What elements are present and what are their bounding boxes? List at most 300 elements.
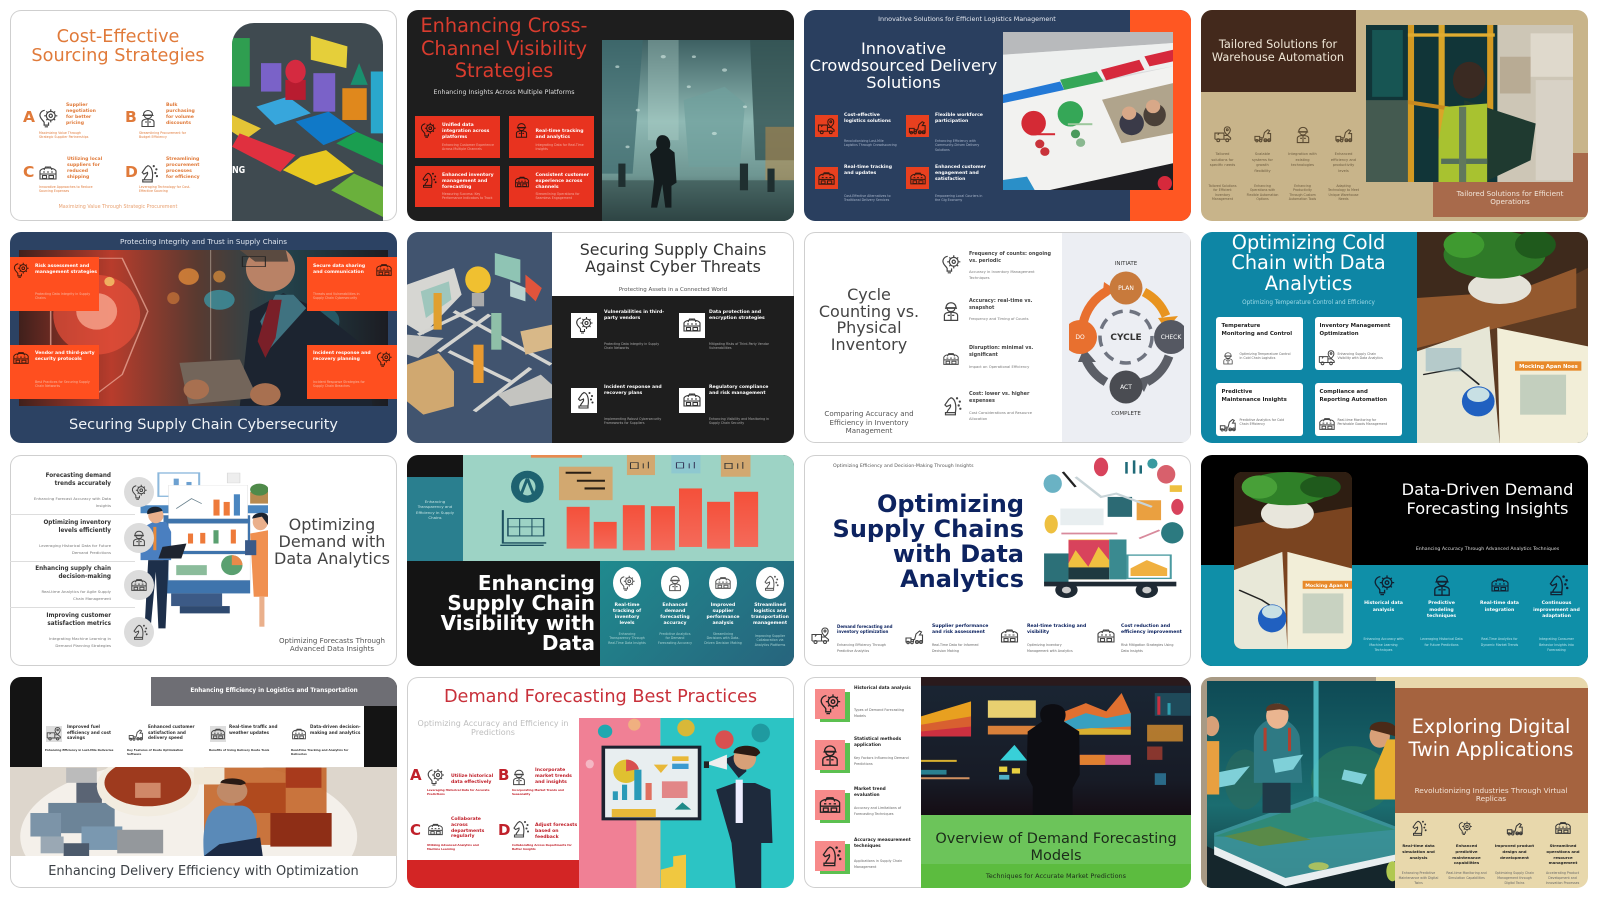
item: decision making: decision-making (58, 574, 111, 580)
title: Analytics (1265, 272, 1352, 295)
column: tailored solutions: for Efficient (1213, 188, 1232, 192)
item: cost reduction: efficiency improvement (1121, 630, 1182, 635)
item D (125, 156, 200, 193)
card: enhanced inventory (415, 166, 500, 207)
item: frequency (942, 251, 1051, 280)
panel: Cost-Effective Sourcing Strategies (10, 10, 397, 221)
image: man with tablet and shield (19, 250, 388, 406)
item D: D (125, 163, 138, 181)
panel: bottom teal features (600, 561, 794, 666)
item: flexible workforce: Flexible workforce (935, 113, 983, 118)
card: consistent customer: Seamless Engagement (536, 196, 572, 200)
subtitle: Optimizing Forecasts Through (279, 636, 385, 645)
column: historical data (1356, 571, 1410, 661)
column: continuous improvement: Continuous (1542, 601, 1571, 606)
item C: Collaborate (451, 817, 481, 822)
column: real-time integration (1472, 571, 1526, 661)
item D: for efficiency (166, 175, 200, 180)
card: compliance reporting: Real-time Monitoring for (1338, 418, 1376, 422)
card: unified data: Enhancing Customer Experience (442, 143, 494, 147)
column: predictive modeling: Leveraging Historical Data (1420, 637, 1463, 641)
column: logistics: logistics and (754, 609, 786, 614)
callout: subtitle block: Chains (428, 515, 442, 520)
title: Data-Driven Demand (1402, 480, 1573, 499)
item A: Utilize historical (451, 774, 493, 779)
column: real-time tracking: inventory (615, 615, 639, 620)
item: flexible workforce: Community-Driven Delivery (935, 143, 979, 147)
item: cost reduction: Risk Mitigation Strategies Using (1121, 643, 1173, 647)
title (407, 573, 595, 653)
card: vendor security (10, 345, 99, 399)
item C: reduced (67, 169, 88, 174)
column: continuous improvement: Behavior Insights into (1539, 642, 1574, 646)
card: unified data (415, 116, 500, 158)
card: unified data: Unified data (442, 123, 474, 128)
column: continuous improvement: Forecasting (1547, 648, 1566, 652)
item: flexible workforce (906, 112, 983, 152)
card: secure data sharing: Secure data sharing (313, 264, 365, 269)
column: real-time tracking (603, 567, 651, 659)
item D: based on (535, 829, 559, 834)
column: continuous improvement: Integrating Consumer (1539, 637, 1574, 641)
panel: Cycle Counting vs. Physical Inventory (804, 232, 1191, 443)
item: traffic updates (209, 724, 284, 758)
card: temperature monitoring: Optimizing Temperature Control (1240, 352, 1290, 356)
card: inventory optimization: Enhancing Supply Chain (1338, 352, 1376, 356)
item: disruption: significant (969, 352, 998, 358)
chart: PDCA cycle: INITIATE (1115, 261, 1138, 267)
footer subtitle: Maximizing Value Through Strategic Procurement (59, 205, 177, 210)
column: real-time tracking: levels (619, 621, 635, 626)
column: product design: Optimizing Supply Chain (1495, 871, 1534, 875)
header band: Enhancing Efficiency in Logistics and Transportation (190, 688, 358, 694)
item: customer satisfaction: satisfaction metrics (47, 621, 111, 627)
title: with Data (893, 540, 1024, 568)
item B (498, 767, 583, 799)
item: real-time tracking: Management with Analytics (1027, 649, 1073, 653)
item: data-driven decisions: Deliveries (291, 752, 307, 756)
title: Data Analytics (274, 549, 390, 568)
item: cost reduction: Cost reduction and (1121, 624, 1170, 629)
item C: shipping (67, 175, 89, 180)
column: integration (1288, 126, 1317, 201)
item: accuracy (944, 298, 1032, 321)
subtitle: Advanced Data Insights (290, 644, 374, 653)
column: real-time tracking: Real-time (615, 603, 639, 608)
column: integration: Enhancing (1294, 184, 1311, 188)
item: cost: expenses (969, 398, 995, 404)
item: real-time tracking: Cost-Effective Alternatives to (844, 194, 891, 198)
image: analyst and mosaic of data (10, 767, 397, 856)
item: accuracy measurement: Management (854, 865, 876, 869)
column: scalable systems: growth (1256, 163, 1269, 167)
card: risk assessment: Chains (35, 296, 46, 300)
item: traffic updates: weather updates (229, 730, 269, 735)
column: scalable systems: Operations with (1250, 188, 1275, 192)
item: cost-effective (815, 112, 897, 147)
item: demand forecasting: Demand forecasting and (837, 624, 892, 629)
band: lower subtitle area (921, 864, 1191, 888)
item C: Machine Learning (427, 847, 455, 851)
card: temperature monitoring: in Cold Chain Logistics (1240, 356, 1275, 360)
top subtitle: Optimizing Efficiency and Decision-Making Through Insights (833, 464, 974, 469)
title: Securing Supply Chains (580, 240, 766, 259)
item: customer satisfaction (127, 724, 202, 758)
subtitle: Optimizing Accuracy and Efficiency in (418, 719, 568, 728)
panel: Cost-Effective Sourcing Strategies: Budget Efficiency (139, 135, 167, 139)
column: simulation: Real-time data (1402, 843, 1435, 848)
subtitle (824, 409, 914, 435)
column: predictive modeling: techniques (1427, 614, 1456, 619)
column: operations (1538, 817, 1588, 887)
column: demand forecasting: Enhanced (662, 603, 688, 608)
item C: Utilizing Advanced Analytics and (427, 843, 479, 847)
item: supplier performance: Real-Time Data for Informed (932, 643, 978, 647)
item: cost: Cost Considerations and Resource (969, 411, 1032, 415)
item: decision making: Real-time Analytics for Agile Supply (42, 589, 111, 594)
card: risk assessment: Risk assessment and (35, 264, 89, 269)
item: enhanced customer (906, 164, 986, 202)
column: logistics: Streamlined (754, 603, 786, 608)
title: Optimizing (877, 490, 1024, 518)
item: real-time tracking (815, 164, 892, 202)
card: predictive maintenance: Maintenance Insights (1222, 397, 1287, 403)
chart: PDCA cycle: PLAN (1118, 285, 1134, 292)
subtitle: Replicas (1476, 794, 1506, 803)
title: Strategies (455, 59, 553, 82)
item: regulatory compliance (679, 384, 769, 425)
item: disruption (943, 345, 1033, 369)
column: logistics (746, 567, 794, 659)
item: customer satisfaction: delivery speed (148, 735, 183, 740)
column: scalable systems: Options (1256, 197, 1269, 201)
item: statistical methods (815, 737, 919, 781)
card: risk assessment (10, 257, 99, 311)
column: supplier performance: Decisions with Data- (707, 636, 739, 640)
item: cost: Cost: lower vs. higher (969, 391, 1029, 397)
title: Solutions (866, 73, 941, 92)
item B: Incorporate (535, 768, 565, 773)
title: Forecasting Insights (1407, 499, 1568, 518)
subtitle: Predictions (471, 728, 515, 737)
item C: suppliers for (67, 163, 100, 168)
column: supplier performance: performance (706, 615, 740, 620)
title: Chain with Data (1231, 251, 1386, 274)
item: cost (944, 391, 1032, 421)
column: predictive modeling: Predictive (1428, 601, 1455, 606)
title: Inventory (831, 335, 907, 354)
column: demand forecasting: for Demand (666, 636, 684, 640)
title (814, 492, 1024, 592)
title: Enhancing Cross- (420, 14, 588, 37)
callout: subtitle block: Transparency and (418, 504, 452, 509)
item C: departments (451, 829, 484, 834)
image: isometric logistics network (407, 232, 552, 443)
item: customer satisfaction: Enhanced customer (148, 724, 195, 729)
item: customer satisfaction: Key Features of Route Optimization (127, 748, 183, 752)
header band (151, 677, 397, 706)
column: efficiency: efficiency and (1331, 158, 1356, 162)
panel: Enhancing Delivery Efficiency with Optimization (10, 677, 397, 888)
item C: across (451, 823, 468, 828)
title: Securing Supply Chain Cybersecurity (69, 417, 338, 433)
item: forecasting demand: Enhancing Forecast Accuracy with Data (34, 496, 111, 501)
item: frequency: Frequency of counts: ongoing (969, 251, 1051, 257)
column: supplier performance: Streamlining (713, 632, 733, 636)
card: real-time tracking: Integrating Data for Real-Time (536, 143, 584, 147)
item: fuel efficiency: savings (67, 735, 85, 740)
item A: Maximizing Value Through (39, 131, 81, 135)
item: accuracy measurement: Accuracy measurement (854, 838, 911, 843)
column: historical data: analysis (1373, 608, 1394, 613)
title (420, 14, 588, 82)
title: Supply Chains (833, 515, 1024, 543)
panel: Optimizing Demand with Data Analytics (10, 455, 397, 666)
column: predictive modeling: modeling (1429, 608, 1454, 613)
card: incident response: Incident Response Strategies for (313, 380, 365, 384)
column: demand forecasting: forecasting (660, 615, 690, 620)
item A: for better (66, 115, 91, 120)
column: product design: development (1500, 855, 1529, 860)
item B (125, 102, 195, 139)
callout: subtitle block (407, 477, 463, 561)
item: inventory levels: Leveraging Historical Data for Future (39, 543, 111, 548)
dark content area (552, 296, 794, 443)
item D: D (498, 821, 510, 839)
card: vendor security: security protocols (35, 357, 82, 362)
left strip (1200, 677, 1206, 888)
column: efficiency (1328, 129, 1359, 201)
item: customer satisfaction: Integrating Machine Learning in (49, 636, 111, 641)
column: logistics: Collaboration via (756, 638, 783, 642)
item D: Streamlining (166, 157, 199, 162)
item: accuracy measurement: techniques (854, 844, 881, 849)
column: product design: Improved product (1495, 843, 1534, 848)
column: simulation: Enhancing Predictive (1402, 871, 1435, 875)
item: disruption: Impact on Operational Efficiency (969, 365, 1029, 369)
item A: Leveraging Historical Data for Accurate (427, 788, 490, 792)
card: vendor security: Vendor and third-party (35, 351, 95, 356)
teal lower band (1200, 565, 1588, 666)
subtitle (407, 719, 579, 738)
column: real-time tracking: tracking of (613, 609, 641, 614)
item: forecasting demand: trends accurately (55, 481, 111, 487)
accent band (1130, 10, 1191, 221)
column: supplier performance: supplier (712, 609, 734, 614)
column: operations: Development and (1548, 876, 1577, 880)
card: enhanced inventory: Enhanced inventory (442, 173, 494, 178)
item: customer satisfaction: Software (127, 752, 141, 756)
item B: discounts (166, 121, 191, 126)
title: Twin Applications (1408, 738, 1574, 760)
item: supplier performance: Supplier performance (932, 624, 988, 629)
item B: B (498, 766, 509, 784)
item: customer satisfaction: satisfaction and (148, 730, 186, 735)
subtitle: Management (846, 426, 892, 435)
title (921, 831, 1191, 865)
item: cost-effective: Logistics Through Crowdsourcing (844, 143, 897, 147)
item: regulatory compliance: Enhancing Visibility and Monitoring in (709, 417, 769, 421)
item: market trend: Market trend (854, 787, 886, 792)
item: fuel efficiency: Enhancing Efficiency in Last-Mile Deliveries (45, 748, 113, 752)
image: presenter at board (579, 718, 794, 888)
item: statistical methods: Key Factors Influencing Demand (854, 756, 909, 760)
subtitle: Revolutionizing Industries Through Virtual (1415, 786, 1567, 795)
panel: Cost-Effective Sourcing Strategies: Strategic Supplier Partnerships (39, 135, 88, 139)
image: warehouse worker (1366, 25, 1573, 182)
item: cost-effective: logistics solutions (844, 119, 891, 124)
chart: PDCA cycle: CYCLE (1110, 333, 1142, 343)
column: demand forecasting (651, 567, 699, 659)
panel: Optimizing Supply Chains with Data Analytics (804, 455, 1191, 666)
title: Crowdsourced Delivery (810, 56, 997, 75)
column: continuous improvement (1530, 571, 1584, 661)
item: frequency: Accuracy in Inventory Management (969, 270, 1035, 274)
top subtitle: Protecting Integrity and Trust in Supply Chains (120, 237, 287, 246)
item: regulatory compliance: and risk management (709, 391, 766, 396)
column: real-time tracking: Enhancing (619, 632, 635, 636)
item: cost-effective: Revolutionizing Last-Mile (844, 139, 884, 143)
item: market trend: evaluation (854, 793, 880, 798)
title block: Tailored Solutions for (1219, 38, 1337, 51)
item C: C (410, 821, 421, 839)
item: real-time tracking: Optimizing Inventory (1027, 643, 1062, 647)
column: efficiency: levels (1338, 169, 1349, 173)
item: incident response: Frameworks for Suppliers (604, 421, 645, 425)
item: accuracy: snapshot (969, 305, 994, 311)
column: efficiency: productivity (1333, 163, 1354, 167)
item: enhanced customer: Enhanced customer (935, 165, 986, 170)
image: colourful isometric blocks (232, 23, 383, 221)
item: decision making (35, 565, 154, 601)
panel: Securing Supply Chains Against Cyber Threats (407, 232, 794, 443)
title: Physical (836, 318, 902, 337)
column: tailored solutions: Management (1212, 197, 1233, 201)
card: inventory optimization: Visibility with Data Analytics (1338, 356, 1383, 360)
column: product design (1490, 817, 1538, 887)
item: accuracy: Frequency and Timing of Counts (969, 317, 1029, 321)
card: consistent customer: Consistent customer (536, 173, 589, 178)
item: forecasting demand (34, 472, 154, 508)
column: operations: management (1549, 860, 1577, 865)
item D: Leveraging Technology for Cost- (139, 185, 190, 189)
column: predictive maintenance: Real-time Monitoring and (1446, 871, 1487, 875)
card: risk assessment: management strategies (35, 270, 97, 275)
title: Visibility with (441, 611, 595, 635)
callout: subtitle block: Enhancing (425, 499, 445, 504)
column: integration: Through Custom (1289, 193, 1316, 197)
column: product design: design and (1502, 849, 1527, 854)
column: scalable systems: flexibility (1254, 169, 1271, 173)
item: demand forecasting: Predictive Analytics (837, 649, 869, 653)
white content panel (42, 677, 364, 767)
card: real-time tracking: and analytics (536, 135, 570, 140)
item: real-time tracking: Real-time tracking (844, 165, 892, 170)
column: tailored solutions: Inventory (1215, 193, 1230, 197)
item: real-time tracking (999, 624, 1091, 656)
column: efficiency: Technology to Meet (1328, 188, 1359, 192)
item C: regularly (451, 834, 474, 839)
item: flexible workforce: Enhancing Efficiency with (935, 139, 976, 143)
column: demand forecasting: Predictive Analytics (659, 632, 691, 636)
column: continuous improvement: improvement and (1533, 608, 1580, 613)
item: incident response: recovery plans (604, 391, 642, 396)
card: consistent customer: Streamlining Operations for (536, 192, 580, 196)
chart: PDCA cycle: CHECK (1161, 334, 1182, 341)
item: statistical methods: Predictions (854, 762, 873, 766)
title: Models (1030, 848, 1082, 864)
item: third-party vendors: Vulnerabilities in third- (604, 310, 664, 315)
card: unified data: integration across (442, 129, 489, 134)
column: tailored solutions: specific needs (1210, 163, 1235, 167)
column: demand forecasting: accuracy (664, 621, 686, 626)
item: inventory levels (39, 519, 154, 555)
hero panel (1394, 688, 1588, 813)
card: predictive maintenance: Predictive Analytics for Cold (1240, 418, 1284, 422)
column: historical data: Machine Learning (1369, 642, 1398, 646)
item: frequency: vs. periodic (969, 258, 1001, 264)
item: fuel efficiency (45, 724, 120, 758)
column: predictive maintenance (1442, 817, 1490, 887)
title (1370, 480, 1600, 518)
column: scalable systems: Flexible Automation (1247, 193, 1278, 197)
card: secure data sharing: and communication (313, 270, 364, 275)
card: risk assessment: Protecting Data Integrity in Supply (35, 292, 90, 296)
item: customer satisfaction: Demand Planning Strategies (55, 643, 111, 648)
item: decision making: Enhancing supply chain (35, 566, 111, 572)
column: integration: Productivity (1293, 188, 1312, 192)
right panel background (1062, 233, 1190, 442)
card: compliance reporting: Compliance and (1320, 389, 1368, 395)
card: predictive maintenance (1216, 383, 1302, 436)
panel: Enhancing Cross-Channel Visibility Strategies (407, 10, 794, 221)
item: data-driven decisions: making and analytics (310, 730, 360, 735)
image: plant and notebook (1234, 472, 1352, 649)
item: data-driven decisions: Data-driven decision- (310, 724, 361, 729)
column: product design: Digital Twins (1505, 881, 1524, 885)
title block (1200, 10, 1356, 92)
card: inventory optimization (1314, 317, 1402, 370)
item: data protection: Vulnerabilities (709, 346, 732, 350)
column: predictive maintenance: Enhanced (1456, 843, 1477, 848)
item: inventory levels: Demand Predictions (72, 550, 111, 555)
item: historical data: Models (854, 714, 866, 718)
title: Supply Chain (447, 591, 595, 615)
image: social media metrics (1003, 32, 1173, 190)
item: demand forecasting (810, 624, 902, 656)
card: enhanced inventory: management and (442, 179, 487, 184)
card: real-time tracking (508, 116, 594, 158)
title (1231, 232, 1386, 295)
panel: Exploring Digital Twin Applications (1200, 677, 1588, 888)
item B: B (125, 108, 137, 126)
item: data protection (679, 310, 769, 350)
item: data protection: Mitigating Risks of Third-Party Vendor (709, 342, 769, 346)
item: real-time tracking: and updates (844, 171, 876, 176)
item: third-party vendors: Chain Networks (604, 346, 629, 350)
item: enhanced customer: satisfaction (935, 177, 965, 182)
item: data-driven decisions: Real-Time Tracking and Analytics for (291, 748, 348, 752)
item: frequency: Techniques (969, 276, 990, 280)
item C (410, 817, 495, 852)
chart: PDCA cycle: COMPLETE (1111, 411, 1141, 417)
image: plant and notebook on desk (1417, 232, 1588, 443)
title (31, 27, 205, 66)
item: third-party vendors (571, 310, 664, 350)
card: consistent customer (508, 166, 594, 207)
column: demand forecasting: demand (665, 609, 685, 614)
item: fuel efficiency: Improved fuel (67, 724, 100, 729)
